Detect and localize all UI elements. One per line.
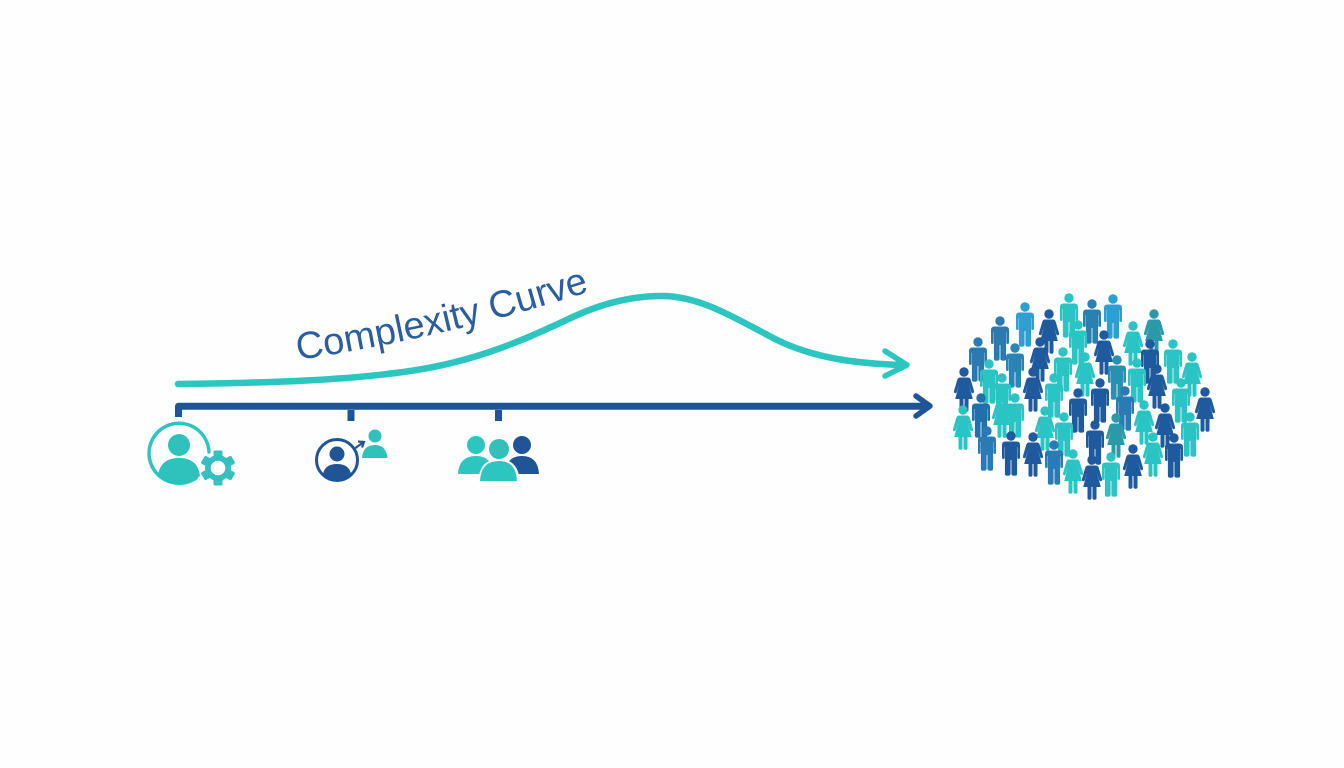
curve label: Complexity Curve bbox=[298, 274, 586, 358]
icon: individual handing off to another person bbox=[316, 430, 388, 481]
person bbox=[1106, 413, 1126, 458]
person bbox=[978, 426, 996, 471]
person bbox=[1094, 330, 1114, 375]
person bbox=[1083, 299, 1101, 344]
icon: individual with gear bbox=[149, 423, 235, 486]
person bbox=[1082, 455, 1102, 500]
person bbox=[1104, 294, 1122, 339]
person bbox=[1182, 352, 1202, 397]
person bbox=[1091, 378, 1109, 423]
person bbox=[953, 405, 973, 450]
person bbox=[1195, 387, 1215, 432]
person bbox=[1069, 388, 1087, 433]
person bbox=[1063, 449, 1083, 494]
person bbox=[1172, 378, 1190, 423]
person bbox=[1023, 432, 1043, 477]
person bbox=[1102, 452, 1120, 497]
person bbox=[1108, 355, 1126, 400]
person bbox=[993, 373, 1011, 418]
person bbox=[980, 359, 998, 404]
timeline arrow with ticks bbox=[178, 396, 930, 421]
person bbox=[1144, 309, 1164, 354]
person bbox=[1075, 352, 1095, 397]
person bbox=[1006, 393, 1024, 438]
person bbox=[1006, 343, 1024, 388]
person bbox=[1141, 339, 1159, 384]
person bbox=[969, 337, 987, 382]
person bbox=[972, 393, 990, 438]
person bbox=[1035, 406, 1055, 451]
person bbox=[954, 367, 974, 412]
person bbox=[1045, 373, 1063, 418]
complexity curve arrow bbox=[178, 296, 907, 384]
person bbox=[1116, 386, 1134, 431]
person bbox=[1123, 444, 1143, 489]
crowd of people bbox=[953, 293, 1215, 500]
person bbox=[1128, 358, 1146, 403]
person bbox=[1181, 412, 1199, 457]
person bbox=[1069, 320, 1087, 365]
person bbox=[1164, 339, 1182, 384]
person bbox=[1165, 433, 1183, 478]
person bbox=[991, 316, 1009, 361]
person bbox=[1045, 440, 1063, 485]
person bbox=[1123, 321, 1143, 366]
person bbox=[1016, 302, 1034, 347]
person bbox=[1155, 403, 1175, 448]
person bbox=[992, 393, 1012, 438]
person bbox=[1147, 364, 1167, 409]
icon: small team bbox=[458, 436, 539, 483]
person bbox=[1054, 347, 1072, 392]
person bbox=[1039, 309, 1059, 354]
person bbox=[1030, 337, 1050, 382]
person bbox=[1060, 293, 1078, 338]
person bbox=[1023, 367, 1043, 412]
person bbox=[1134, 400, 1154, 445]
person bbox=[1143, 432, 1163, 477]
person bbox=[1055, 412, 1073, 457]
person bbox=[1086, 420, 1104, 465]
person bbox=[1002, 431, 1020, 476]
